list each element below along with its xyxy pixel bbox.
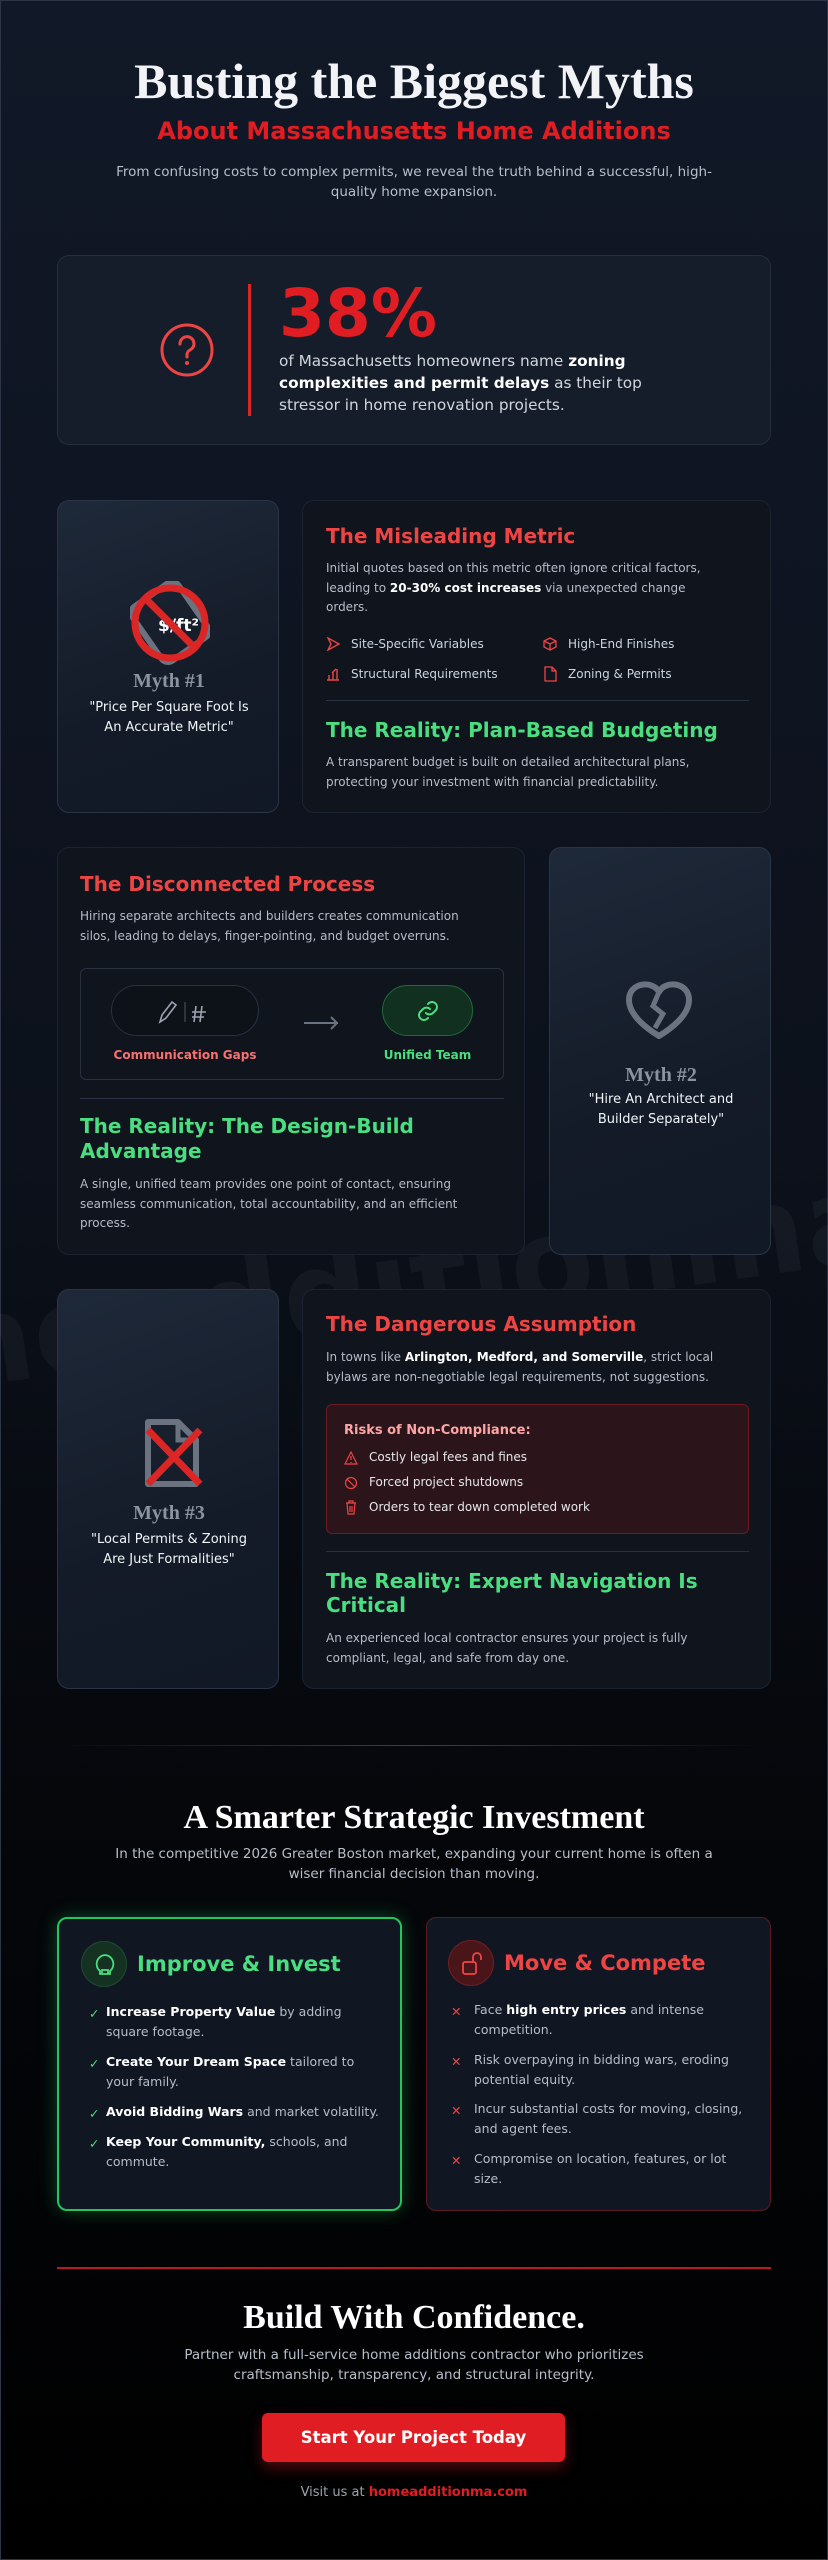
reality text [80, 1177, 458, 1230]
risk list: size. [474, 2170, 502, 2186]
heading: Improve & Invest [137, 1952, 341, 1976]
text: orders. [326, 600, 368, 614]
benefit list: your family. [106, 2074, 179, 2088]
icon: lock [448, 1940, 494, 1986]
text: Hiring separate architects and builders creates communication [80, 909, 459, 923]
risk list: Risk overpaying in bidding wars, eroding [474, 2052, 729, 2067]
panel: move & compete [426, 1917, 771, 2211]
myth quote: "Price Per Square Foot Is [89, 700, 249, 715]
reality heading [80, 1114, 414, 1163]
reality heading: The Reality: Expert Navigation Is [326, 1569, 698, 1593]
risk box: Risks of Non-Compliance: [344, 1423, 531, 1438]
diagram: gaps to unified [80, 968, 504, 1080]
intro text [115, 1846, 713, 1882]
reality text: seamless communication, total accountability, and an efficient [80, 1196, 457, 1210]
icon: home [81, 1941, 127, 1987]
myth quote: "Hire An Architect and [589, 1092, 733, 1107]
reality text: process. [80, 1216, 130, 1230]
risk list [451, 2002, 742, 2186]
reality heading: The Reality: Plan-Based Budgeting [326, 718, 718, 742]
myth quote [91, 1532, 247, 1567]
benefit list: ✓ [89, 2106, 99, 2121]
factor list: High-End Finishes [568, 637, 674, 651]
pill: communication gaps [111, 985, 259, 1036]
red rule [248, 284, 251, 416]
closing text: craftsmanship, transparency, and structural integrity. [234, 2366, 594, 2382]
arrow [304, 1016, 338, 1030]
risk box: Costly legal fees and fines [369, 1450, 527, 1464]
reality text: An experienced local contractor ensures your project is fully [326, 1631, 688, 1645]
closing text: Partner with a full-service home additions contractor who prioritizes [184, 2347, 644, 2363]
factor list: Site-Specific Variables [351, 637, 484, 651]
myth label: Myth #1 [133, 670, 205, 692]
stat text [279, 352, 642, 414]
reality text: compliant, legal, and safe from day one. [326, 1650, 569, 1664]
intro text: In the competitive 2026 Greater Boston market, expanding your current home is often a [115, 1846, 713, 1862]
factor list: Structural Requirements [351, 667, 498, 681]
intro text: From confusing costs to complex permits, we reveal the truth behind a successful, high- [116, 164, 712, 180]
text [326, 1350, 713, 1384]
title: Busting the Biggest Myths [134, 53, 694, 109]
panel: stat [57, 255, 771, 445]
panel: myth 1 card [57, 500, 279, 813]
icon: broken heart [626, 981, 692, 1039]
risk list: Face high entry prices and intense [474, 2002, 704, 2017]
reality text: A transparent budget is built on detailed architectural plans, [326, 755, 689, 769]
reality text [326, 755, 689, 788]
stat number: 38% [279, 275, 437, 352]
myth quote: "Local Permits & Zoning [91, 1532, 247, 1547]
risk list: and agent fees. [474, 2120, 572, 2136]
reality heading: The Reality: The Design-Build [80, 1114, 414, 1138]
intro text: wiser financial decision than moving. [289, 1866, 539, 1882]
label: gaps: Communication Gaps [114, 1048, 256, 1062]
heading: The Dangerous Assumption [326, 1312, 636, 1336]
reality heading: Critical [326, 1593, 406, 1617]
panel: myth 3 card [57, 1289, 279, 1689]
panel: myth 1 explanation [302, 500, 771, 813]
risk list: potential equity. [474, 2072, 575, 2086]
myth quote: Builder Separately" [598, 1112, 724, 1127]
pill: unified team [382, 985, 473, 1036]
factor list [326, 637, 674, 682]
benefit list: square footage. [106, 2024, 204, 2038]
myth label: Myth #3 [133, 1502, 205, 1524]
text: bylaws are non-negotiable legal requirements, not suggestions. [326, 1370, 709, 1384]
button: cta: Start Your Project Today [301, 2428, 526, 2447]
reality text: protecting your investment with financial predictability. [326, 774, 658, 788]
risk box: Forced project shutdowns [369, 1475, 523, 1489]
text: leading to 20-30% cost increases via unexpected change [326, 580, 685, 594]
panel: myth 2 card [549, 847, 771, 1255]
stat text: stressor in home renovation projects. [279, 396, 565, 414]
reality heading: Advantage [80, 1139, 202, 1163]
risk list: ✕ [451, 2153, 461, 2168]
myth quote [589, 1092, 733, 1127]
risk list: Compromise on location, features, or lot [474, 2151, 726, 2166]
text [80, 909, 459, 942]
stat text: of Massachusetts homeowners name zoning [279, 352, 626, 370]
subtitle: About Massachusetts Home Additions [157, 117, 671, 145]
panel: myth 3 explanation [302, 1289, 771, 1689]
risk list: ✕ [451, 2103, 461, 2118]
panel: myth 2 explanation [57, 847, 525, 1255]
benefit list: Increase Property Value by adding [106, 2004, 342, 2019]
label: unified: Unified Team [384, 1048, 471, 1062]
risk list: ✕ [451, 2054, 461, 2069]
reality text [326, 1631, 688, 1664]
button: cta [262, 2413, 565, 2462]
reality heading [326, 1569, 698, 1617]
factor list: Zoning & Permits [568, 667, 672, 681]
text: In towns like Arlington, Medford, and Somerville, strict local [326, 1350, 713, 1364]
text [326, 561, 701, 614]
benefit list: commute. [106, 2154, 169, 2168]
myth quote [89, 700, 249, 735]
benefit list: ✓ [89, 2136, 99, 2151]
risk box: Orders to tear down completed work [369, 1500, 590, 1514]
risk list: ✕ [451, 2004, 461, 2019]
icon: question [160, 324, 214, 376]
closing text [184, 2347, 644, 2382]
benefit list: ✓ [89, 2006, 99, 2021]
icon: crossed document [145, 1419, 202, 1487]
reality text: A single, unified team provides one point of contact, ensuring [80, 1177, 451, 1191]
myth label: Myth #2 [625, 1064, 697, 1086]
icon: no price per sq ft: $/ft² [158, 616, 199, 636]
website: Visit us at homeadditionma.com [301, 2485, 527, 2500]
heading: smarter investment: A Smarter Strategic Investment [183, 1799, 645, 1836]
benefit list: Avoid Bidding Wars and market volatility. [106, 2104, 379, 2119]
heading: Move & Compete [504, 1951, 705, 1975]
text: silos, leading to delays, finger-pointing, and budget overruns. [80, 928, 450, 942]
text: Initial quotes based on this metric often ignore critical factors, [326, 561, 701, 575]
myth quote: Are Just Formalities" [103, 1552, 235, 1567]
heading: The Disconnected Process [80, 872, 375, 896]
risk list: competition. [474, 2022, 553, 2036]
icon: no price per sq ft [130, 581, 210, 665]
risk box [326, 1404, 749, 1534]
heading: The Misleading Metric [326, 524, 575, 548]
benefit list: Keep Your Community, schools, and [106, 2134, 347, 2149]
benefit list: ✓ [89, 2056, 99, 2071]
risk list: Incur substantial costs for moving, closing, [474, 2101, 742, 2116]
benefit list [89, 2004, 379, 2168]
stat text: complexities and permit delays as their top [279, 374, 642, 392]
myth quote: An Accurate Metric" [104, 720, 234, 735]
heading: build with confidence: Build With Confidence. [243, 2299, 585, 2336]
intro text [116, 164, 712, 200]
panel: improve & invest [57, 1917, 402, 2211]
intro text: quality home expansion. [331, 184, 497, 200]
benefit list: Create Your Dream Space tailored to [106, 2054, 354, 2069]
